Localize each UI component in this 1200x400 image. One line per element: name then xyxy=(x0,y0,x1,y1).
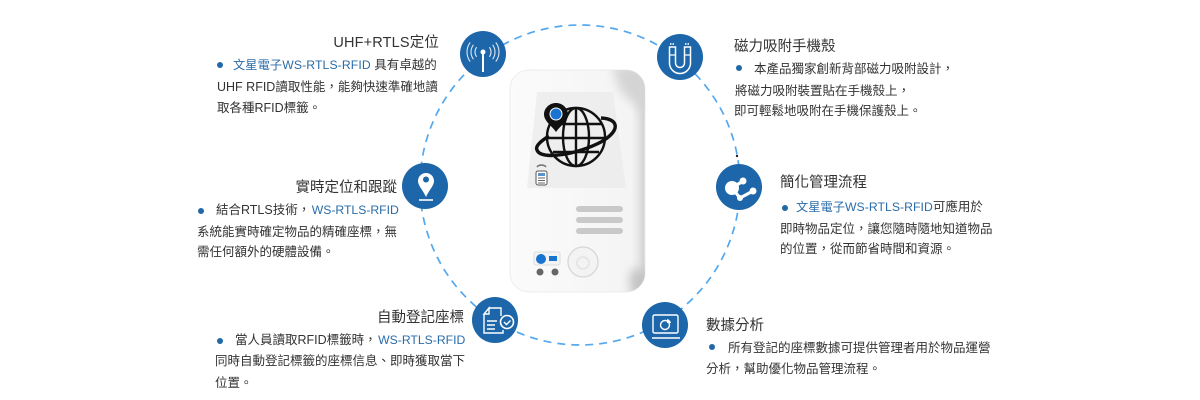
icon: magnet xyxy=(657,34,703,80)
heading: UHF+RTLS: UHF+RTLS定位 xyxy=(333,35,439,51)
line 1: 當人員讀取RFID標籤時， WS-RTLS-RFID xyxy=(235,333,465,347)
line 1: 本產品獨家創新背部磁力吸附設計， xyxy=(754,62,954,76)
bullet xyxy=(782,205,788,211)
text block: auto coordinates xyxy=(215,309,465,390)
text block: magnetic xyxy=(734,38,954,118)
heading: magnetic: 磁力吸附手機殼 xyxy=(734,39,836,55)
text block: real-time positioning xyxy=(197,179,399,259)
line 2: 同時自動登記標籤的座標信息、即時獲取當下 xyxy=(215,354,465,368)
text block: UHF+RTLS xyxy=(217,34,439,115)
line 2: 將磁力吸附裝置貼在手機殼上， xyxy=(735,84,910,98)
bullet xyxy=(198,208,204,214)
line 3: 需任何額外的硬體設備。 xyxy=(197,245,335,259)
icon: laptop chart xyxy=(642,302,688,348)
line 1: 文星電子WS-RTLS-RFID可應用於 xyxy=(796,200,983,214)
device illustration xyxy=(510,66,650,294)
icon: antenna xyxy=(460,31,506,77)
line 3: 的位置，從而節省時間和資源。 xyxy=(780,242,955,256)
heading: real-time: 實時定位和跟蹤 xyxy=(296,180,397,196)
line 1: 所有登記的座標數據可提供管理者用於物品運營 xyxy=(728,341,991,355)
line 1: 文星電子WS-RTLS-RFID 具有卓越的 xyxy=(233,58,437,72)
heading: simplified: 簡化管理流程 xyxy=(780,175,867,191)
location pin xyxy=(544,103,568,132)
text block: data analysis xyxy=(706,317,991,376)
vents xyxy=(576,206,623,212)
dashed circle with icons and device xyxy=(402,24,762,348)
icon: document check xyxy=(472,297,518,343)
icon: share nodes xyxy=(716,164,762,210)
line 2: 系統能實時確定物品的精確座標，無 xyxy=(197,225,397,239)
power button xyxy=(568,247,598,277)
reader icon xyxy=(536,171,547,185)
icon: map pin xyxy=(402,163,448,209)
line 1: 結合RTLS技術， WS-RTLS-RFID xyxy=(216,203,399,217)
bullet xyxy=(217,338,223,344)
line 2: 分析，幫助優化物品管理流程。 xyxy=(706,362,881,376)
line 3: 即可輕鬆地吸附在手機保護殼上。 xyxy=(734,104,922,118)
status LEDs xyxy=(534,252,560,265)
line 3: 取各種RFID標籤。 xyxy=(217,101,321,115)
bullet xyxy=(709,344,715,350)
heading: data analysis: 數據分析 xyxy=(706,318,764,334)
line 2: 即時物品定位，讓您隨時隨地知道物品 xyxy=(780,222,993,236)
heading: auto coordinates: 自動登記座標 xyxy=(377,310,464,326)
text block: simplified management xyxy=(780,174,993,256)
bullet xyxy=(736,65,742,71)
globe icon xyxy=(537,108,615,166)
bullet xyxy=(217,62,223,68)
line 2: UHF RFID讀取性能，能夠快速準確地讀 xyxy=(217,80,438,94)
line 3: 位置。 xyxy=(215,376,253,390)
